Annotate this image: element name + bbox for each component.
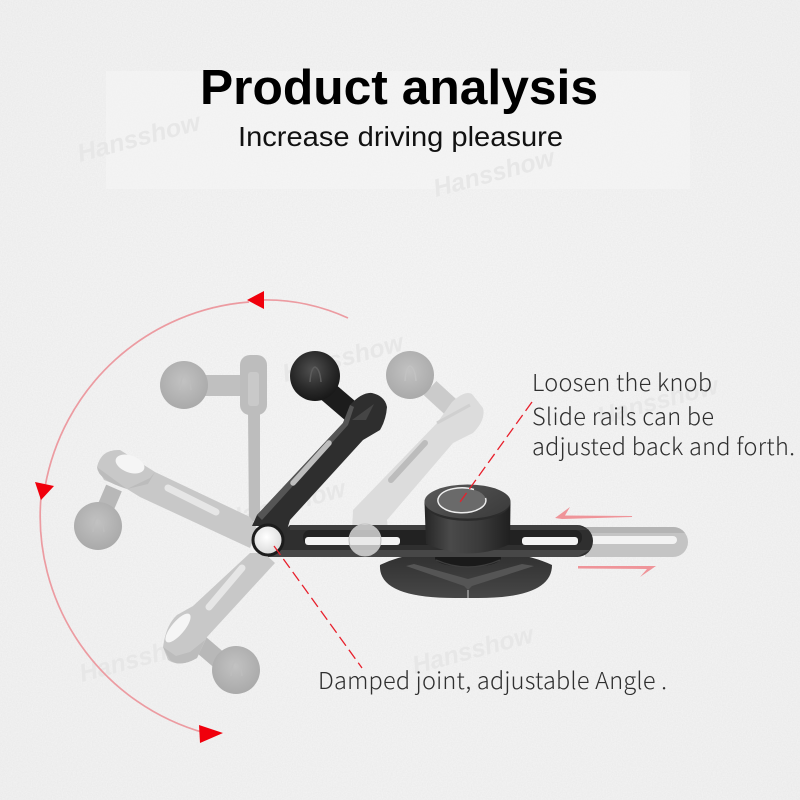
watermarks: Hansshow (279, 328, 408, 388)
black slide rail (268, 525, 593, 557)
rotation arc with arrowheads (35, 291, 348, 743)
ghost slide rail (585, 527, 688, 557)
watermarks: Hansshow (594, 371, 723, 431)
translucent ghost pin (349, 524, 381, 556)
ghost arm: right (352, 351, 484, 530)
black arm with ball (252, 351, 387, 540)
ghost arm: upright (160, 355, 267, 528)
knob (424, 484, 510, 554)
callout: knob: Slide rails can be (532, 398, 714, 432)
watermarks: Hansshow (76, 628, 205, 688)
title: Product analysis (200, 61, 598, 115)
callout: joint: Damped joint, adjustable Angle . (318, 662, 667, 696)
watermarks: Hansshow (430, 143, 559, 203)
ghost arm: left (74, 450, 258, 550)
watermarks: Hansshow (409, 620, 538, 680)
base plate (380, 549, 552, 598)
watermarks: Hansshow (74, 108, 205, 168)
pivot pin (253, 525, 283, 555)
leader line: joint (274, 546, 362, 668)
leader line: knob (460, 402, 532, 502)
callout: knob (532, 364, 795, 462)
watermarks (74, 108, 723, 688)
subtitle: Increase driving pleasure (238, 121, 563, 152)
header band (106, 71, 690, 189)
ghost arm: lower (161, 553, 275, 694)
watermarks: Hansshow (221, 474, 350, 534)
callout: knob: Loosen the knob (532, 364, 712, 398)
slide arrows (555, 507, 656, 577)
callout: knob: adjusted back and forth. (532, 428, 795, 462)
